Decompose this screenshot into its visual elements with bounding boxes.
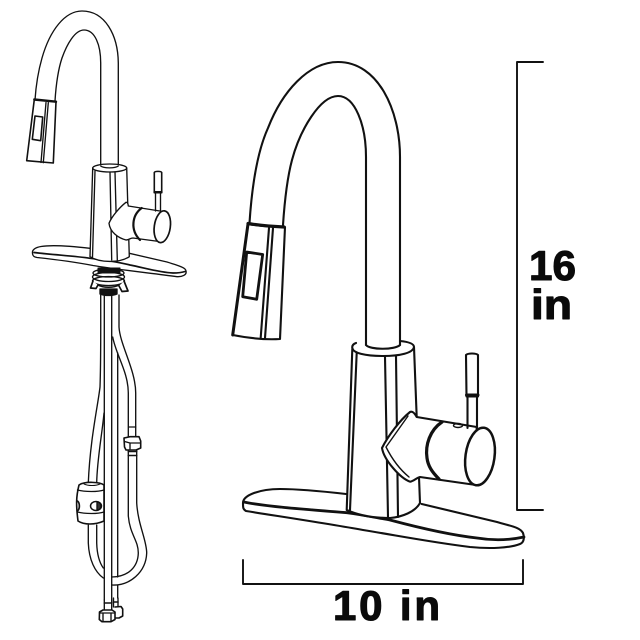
width label: 10 in [333, 582, 440, 629]
hose connector nut [124, 437, 141, 450]
height label: 16 [529, 242, 576, 289]
large faucet base [347, 341, 420, 518]
height unit: in [531, 281, 572, 328]
hose: right supply [112, 295, 147, 585]
small deck plate [32, 246, 186, 277]
large deck plate [243, 489, 524, 548]
large spout [250, 62, 400, 345]
small handle [109, 171, 172, 244]
width bracket [243, 560, 523, 584]
height dimension: 16 in [517, 62, 576, 510]
small faucet base [90, 164, 129, 261]
small spray head [27, 100, 56, 163]
height bracket [517, 62, 543, 510]
small faucet spout [35, 11, 118, 167]
hose: left pull-down [88, 295, 104, 578]
small exploded faucet diagram [27, 11, 186, 622]
large handle [382, 354, 498, 487]
weight clamp [77, 482, 104, 524]
width dimension: 10 in [243, 560, 523, 629]
bottom fittings [99, 598, 123, 622]
large faucet diagram [233, 62, 524, 548]
supply tube: centre [104, 295, 118, 600]
large spray head [233, 224, 285, 339]
small mounting hardware [90, 268, 128, 296]
